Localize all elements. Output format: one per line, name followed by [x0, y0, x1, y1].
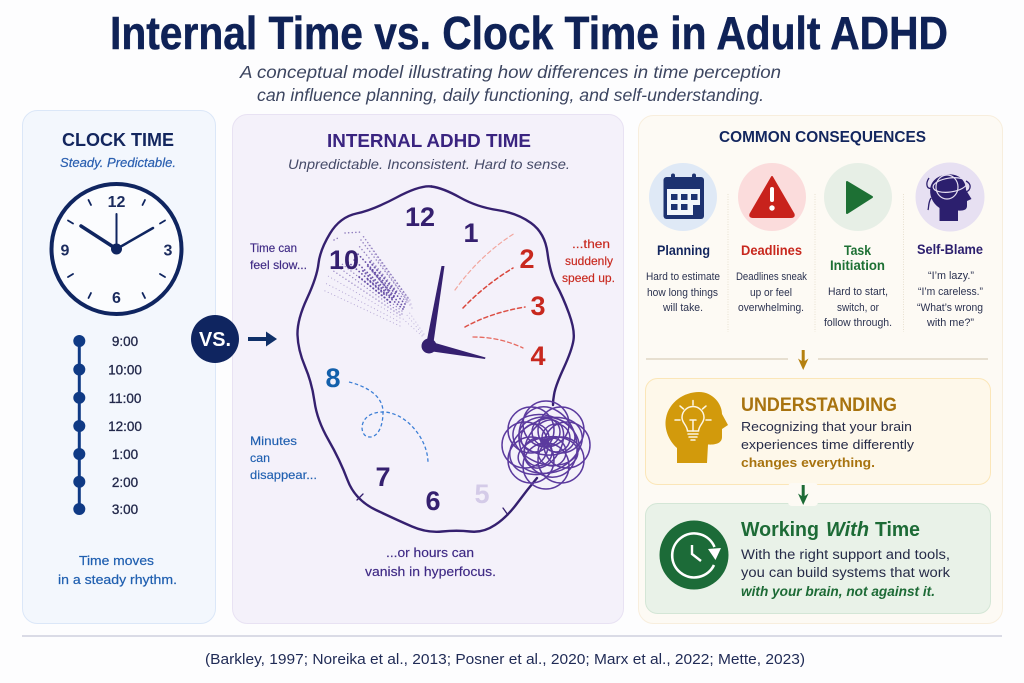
item: self-blame: “I’m careless.”: [918, 286, 983, 298]
box: working with time: With: [826, 519, 869, 541]
tagline: unpredictable: Unpredictable. Inconsistent. Hard to sense.: [288, 156, 570, 172]
label: hyperfocus: vanish in hyperfocus.: [365, 564, 496, 579]
label: speed up: [562, 237, 615, 285]
label: minutes disappear: Minutes: [250, 434, 297, 448]
box: understanding: [646, 378, 990, 484]
icon: calendar: [649, 163, 717, 231]
label: minutes disappear: disappear...: [250, 468, 317, 482]
box: understanding: experiences time differently: [741, 437, 915, 452]
heading: clock time: CLOCK TIME: [62, 130, 174, 150]
item: self-blame: “What’s wrong: [917, 302, 983, 314]
subtitle: [239, 62, 781, 105]
wavy clock outline: [297, 186, 574, 532]
item: planning: will take.: [662, 302, 703, 314]
dashed loop: [349, 382, 428, 463]
icon: warning triangle: [738, 163, 806, 231]
box: working with time: Time: [875, 519, 920, 541]
box: understanding: changes everything.: [741, 455, 875, 470]
clock hands: [422, 266, 486, 359]
box: working with time: With the right support and tools,: [741, 547, 950, 562]
panel: internal ADHD time: [232, 114, 624, 624]
label: minutes disappear: [250, 434, 317, 482]
dial numbers: 5: [474, 479, 490, 509]
dial numbers: [325, 202, 546, 516]
timeline: hours: 2:00: [112, 475, 138, 490]
icon: analog clock: 3: [164, 242, 173, 260]
item: deadlines: up or feel: [750, 287, 792, 299]
label: feel slow: feel slow...: [250, 258, 307, 272]
icon: clock with cycle arrow: [660, 520, 728, 590]
dissolving dots wedge: [323, 232, 424, 336]
icon: analog clock: 6: [112, 290, 121, 307]
icon: head with lightbulb: [665, 392, 728, 463]
timeline: hours: 11:00: [109, 391, 141, 406]
label: speed up: ...then: [572, 237, 610, 251]
caption: steady rhythm: Time moves: [79, 553, 155, 568]
item: task initiation: [824, 163, 892, 329]
box: working with time: Working: [741, 519, 819, 541]
dial numbers: 8: [325, 363, 341, 393]
icon: tangled head: [916, 162, 984, 232]
arrow: gold down: [798, 350, 808, 370]
item: task initiation: Initiation: [830, 257, 885, 273]
item: self-blame: “I’m lazy.”: [928, 270, 974, 282]
label: feel slow: [250, 241, 307, 272]
item: planning: Planning: [657, 242, 710, 258]
item: task initiation: Task: [844, 242, 871, 258]
dial numbers: 6: [425, 486, 441, 516]
label: hyperfocus: [365, 545, 496, 579]
dial numbers: 12: [405, 202, 435, 232]
icon: play: [824, 163, 892, 231]
caption: steady rhythm: [58, 553, 177, 587]
timeline: hours: 3:00: [112, 502, 138, 517]
citations: (Barkley, 1997; Noreika et al., 2013; Posner et al., 2020; Marx et al., 2022; Mette, 2023): [205, 651, 805, 668]
caption: steady rhythm: in a steady rhythm.: [58, 572, 177, 587]
icon: analog clock: 9: [61, 242, 70, 260]
dial numbers: 4: [530, 341, 546, 371]
arrow: VS to internal clock: [248, 332, 277, 346]
subtitle: can influence planning, daily functioning, and self-understanding.: [257, 85, 764, 105]
tagline: steady: Steady. Predictable.: [60, 155, 176, 170]
icon: analog clock: 12: [108, 194, 126, 211]
box: working with time: with your brain, not against it.: [741, 584, 935, 599]
item: task initiation: switch, or: [837, 302, 879, 314]
scribble tangle: [501, 399, 591, 489]
timeline: hours: 10:00: [108, 362, 142, 378]
item: task initiation: follow through.: [824, 317, 892, 329]
label: hyperfocus: ...or hours can: [386, 545, 474, 560]
dial numbers: 2: [519, 244, 535, 274]
item: planning: Hard to estimate: [646, 271, 720, 283]
box: working with time: [646, 504, 990, 614]
dial numbers: 10: [329, 245, 359, 275]
item: deadlines: overwhelming.: [738, 302, 804, 314]
item: planning: [646, 163, 720, 314]
heading: internal time: INTERNAL ADHD TIME: [327, 131, 531, 151]
dial numbers: 1: [463, 218, 479, 248]
dial numbers: 3: [530, 291, 546, 321]
icon: analog clock: [52, 184, 182, 314]
box: working with time: you can build systems that work: [741, 565, 950, 580]
timeline: hours: [73, 334, 142, 517]
dial numbers: 7: [375, 462, 391, 492]
subtitle: A conceptual model illustrating how differences in time perception: [239, 62, 781, 82]
label: speed up: suddenly: [565, 254, 613, 268]
label: minutes disappear: can: [250, 451, 270, 465]
item: deadlines: [736, 163, 807, 314]
panel: common consequences: [638, 116, 1002, 624]
item: task initiation: Hard to start,: [828, 286, 888, 298]
item: planning: how long things: [647, 287, 718, 299]
badge: VS: VS.: [199, 329, 231, 351]
item: self-blame: Self-Blame: [917, 241, 983, 257]
label: feel slow: Time can: [250, 241, 297, 255]
item: deadlines: Deadlines sneak: [736, 271, 807, 283]
speed-up dashed lines: [455, 233, 525, 348]
badge: VS: [191, 315, 239, 363]
item: deadlines: Deadlines: [741, 242, 802, 258]
timeline: hours: 12:00: [108, 419, 142, 434]
label: speed up: speed up.: [562, 271, 615, 285]
panel: clock time: [22, 110, 216, 624]
heading: consequences: COMMON CONSEQUENCES: [719, 129, 926, 146]
box: understanding: UNDERSTANDING: [741, 395, 897, 416]
timeline: hours: 1:00: [112, 447, 138, 462]
item: self-blame: with me?”: [926, 317, 974, 329]
box: understanding: Recognizing that your brain: [741, 419, 912, 434]
item: self-blame: [916, 162, 984, 329]
arrow: green down: [798, 485, 808, 505]
timeline: hours: 9:00: [112, 334, 138, 349]
